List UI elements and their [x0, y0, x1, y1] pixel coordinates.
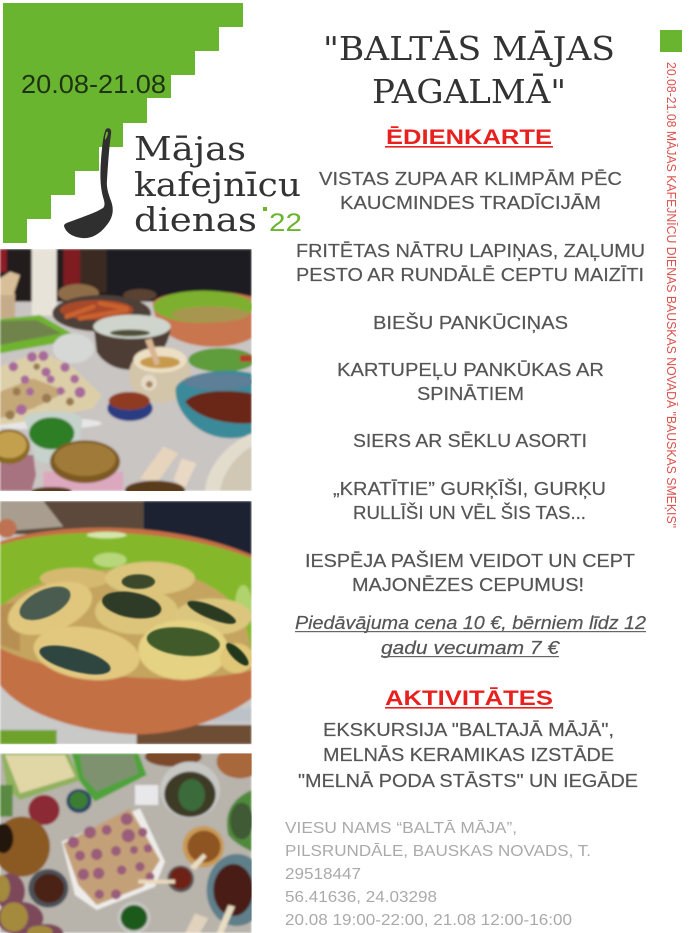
- green tray: [72, 753, 147, 802]
- address and hours: 20.08 19:00-22:00, 21.08 12:00-16:00: [285, 912, 572, 929]
- title: [323, 29, 615, 111]
- price note: [295, 613, 646, 658]
- bowl inner: [0, 532, 252, 652]
- green tray: [0, 315, 72, 353]
- jars: [0, 455, 36, 491]
- white plate: [62, 808, 165, 910]
- logo wordmark: 22: [269, 209, 302, 237]
- menu list: MAJONĒZES CEPUMUS!: [352, 575, 584, 595]
- sauce ramekin: [183, 826, 224, 867]
- address and hours: 56.41636, 24.03298: [285, 889, 437, 906]
- date label: 20.08-21.08: [21, 69, 166, 99]
- photo: food table: [0, 249, 255, 499]
- fritter base: [0, 569, 252, 679]
- menu list: RULLĪŠI UN VĒL ŠIS TAS...: [353, 502, 586, 523]
- activities list: "MELNĀ PODA STĀSTS" UN IEGĀDE: [298, 771, 638, 791]
- green square: [660, 30, 682, 52]
- photo: nettle fritters in green bowl: [0, 501, 253, 744]
- red jam: [28, 795, 60, 825]
- logo wordmark: dienas: [134, 200, 257, 239]
- address and hours: PILSRUNDĀLE, BAUSKAS NOVADS, T.: [285, 843, 591, 860]
- activities list: MELNĀS KERAMIKAS IZSTĀDE: [323, 745, 614, 765]
- bowl outer: [0, 528, 252, 734]
- menu list: KAUCMINDES TRADĪCIJĀM: [340, 193, 601, 213]
- address and hours: 29518447: [285, 866, 361, 883]
- menu list: [296, 169, 645, 595]
- heading: ĒDIENKARTE: ĒDIENKARTE: [386, 126, 552, 149]
- logo wordmark: Mājas: [134, 129, 246, 168]
- salad right: [227, 790, 252, 852]
- ceramic pot: [129, 347, 191, 403]
- herb bowl: [160, 762, 220, 818]
- dark sauce: [28, 869, 68, 908]
- title: PAGALMĀ": [372, 72, 566, 111]
- address and hours: [285, 820, 591, 929]
- greens cup: [24, 411, 83, 463]
- pink flowers plate: [0, 417, 102, 429]
- activities list: [298, 720, 638, 791]
- patterned bowl: [206, 853, 252, 927]
- address and hours: VIESU NAMS “BALTĀ MĀJA”,: [285, 820, 517, 837]
- heading: AKTIVITĀTES: AKTIVITĀTES: [385, 687, 553, 710]
- price note: gadu vecumam 7 €: [381, 638, 560, 658]
- fritters: [0, 602, 20, 652]
- menu list: SIERS AR SĒKLU ASORTI: [353, 431, 587, 451]
- patterned bowl: [176, 371, 252, 438]
- small sauce bowl: [106, 402, 154, 422]
- menu list: IESPĒJA PAŠIEM VEIDOT UN CEPT: [305, 550, 635, 571]
- logo: Mājas kafejnīcu dienas 22: [64, 128, 302, 239]
- activities list: EKSKURSIJA "BALTAJĀ MĀJĀ",: [323, 720, 614, 740]
- salad right: [188, 348, 255, 372]
- greens: [117, 902, 151, 933]
- menu list: BIEŠU PANKŪCIŅAS: [373, 312, 568, 333]
- brown jug: [0, 817, 50, 877]
- menu list: FRITĒTAS NĀTRU LAPIŅAS, ZAĻUMU: [296, 241, 645, 261]
- logo wordmark: kafejnīcu: [134, 165, 301, 204]
- orange bowl: [153, 291, 252, 347]
- logo wordmark: [134, 129, 302, 239]
- sticks: [140, 447, 178, 483]
- menu list: SPINĀTIEM: [417, 384, 524, 404]
- title: "BALTĀS MĀJAS: [323, 29, 615, 68]
- tray of pastry: [2, 753, 82, 800]
- price note: Piedāvājuma cena 10 €, bērniem līdz 12: [295, 613, 646, 633]
- menu list: KARTUPEĻU PANKŪKAS AR: [337, 360, 604, 380]
- white dish: [205, 433, 252, 491]
- jars: [0, 873, 25, 910]
- icon: ladle: [64, 128, 113, 238]
- chutney: [167, 866, 194, 892]
- green stepped shape: [3, 3, 243, 243]
- photo: food table from above: [0, 745, 267, 933]
- dark bowl: [93, 323, 171, 370]
- menu list: „KRATĪTIE” GURĶĪŠI, GURĶU: [333, 478, 606, 499]
- menu list: VISTAS ZUPA AR KLIMPĀM PĒC: [319, 169, 622, 189]
- vertical side text: 20.08-21.08 MĀJAS KAFEJNĪCU DIENAS BAUSKAS NOVADĀ "BAUSKAS SMEĶIS": [664, 62, 678, 528]
- menu list: PESTO AR RUNDĀLĒ CEPTU MAIZĪTI: [296, 265, 644, 285]
